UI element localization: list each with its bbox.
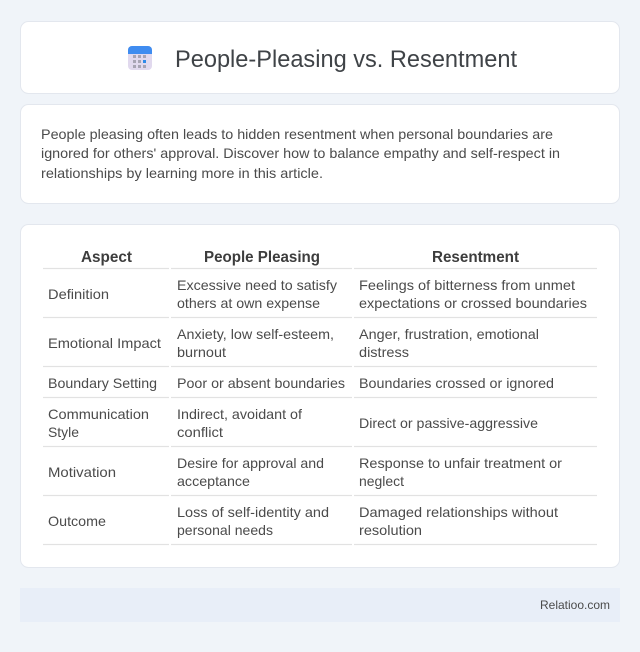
- row: motivation: neglect: [359, 473, 404, 489]
- panel: comparison table: [20, 224, 620, 568]
- row: outcome: personal needs: [177, 522, 273, 538]
- text block: introduction: People pleasing often leads to hidden resentment when personal boundaries are: [41, 126, 553, 142]
- row: boundary setting: [48, 375, 554, 391]
- row: emotional impact: burnout: [177, 344, 226, 360]
- title: People-Pleasing vs. Resentment: [175, 46, 517, 73]
- row: communication style: Indirect, avoidant of: [177, 406, 302, 422]
- footer: [20, 588, 620, 622]
- row: outcome: [48, 504, 558, 538]
- table header: Resentment: [432, 249, 520, 266]
- panel: header: [20, 22, 620, 94]
- row: outcome: Damaged relationships without: [359, 504, 558, 520]
- footer: Relatioo.com: [540, 598, 610, 612]
- table header: Aspect: [81, 249, 133, 266]
- panel: introduction: [20, 104, 620, 204]
- row: emotional impact: Anxiety, low self-esteem,: [177, 326, 334, 342]
- row: definition: expectations or crossed boundaries: [359, 295, 587, 311]
- row: motivation: acceptance: [177, 473, 250, 489]
- table header: People Pleasing: [204, 249, 320, 266]
- row: definition: [48, 277, 587, 311]
- row: motivation: Motivation: [48, 464, 116, 480]
- row: definition: others at own expense: [177, 295, 320, 311]
- text block: introduction: [41, 126, 560, 181]
- table header: [81, 249, 520, 266]
- row: boundary setting: Boundary Setting: [48, 375, 157, 391]
- row: outcome: resolution: [359, 522, 422, 538]
- row: outcome: Loss of self-identity and: [177, 504, 329, 520]
- row: emotional impact: Emotional Impact: [48, 335, 161, 351]
- row: definition: Feelings of bitterness from unmet: [359, 277, 575, 293]
- text block: introduction: relationships by learning more in this article.: [41, 165, 323, 181]
- row: emotional impact: Anger, frustration, emotional: [359, 326, 539, 342]
- row: communication style: Communication: [48, 406, 149, 422]
- row: outcome: Outcome: [48, 513, 106, 529]
- row: communication style: conflict: [177, 424, 223, 440]
- icon: calendar: [128, 46, 152, 70]
- row: emotional impact: distress: [359, 344, 409, 360]
- row: definition: Excessive need to satisfy: [177, 277, 337, 293]
- row: communication style: Style: [48, 424, 79, 440]
- row: motivation: [48, 455, 562, 489]
- row: boundary setting: Poor or absent boundaries: [177, 375, 345, 391]
- row: motivation: Response to unfair treatment or: [359, 455, 562, 471]
- row: communication style: Direct or passive-aggressive: [359, 415, 538, 431]
- row: boundary setting: Boundaries crossed or ignored: [359, 375, 554, 391]
- text block: introduction: ignored for others' approval. Discover how to balance empathy and self-respect in: [41, 145, 560, 161]
- row: motivation: Desire for approval and: [177, 455, 324, 471]
- row: definition: Definition: [48, 286, 109, 302]
- row: emotional impact: [48, 326, 539, 360]
- row: communication style: [48, 406, 538, 440]
